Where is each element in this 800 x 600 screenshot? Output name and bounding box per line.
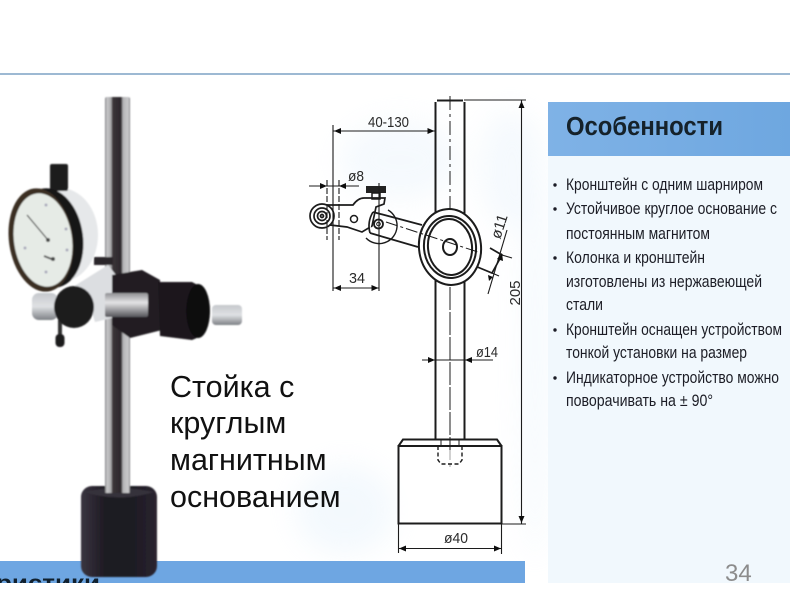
fine adjust knob [158, 282, 210, 340]
column [436, 100, 464, 439]
caption [170, 370, 341, 514]
extension and dimension lines [309, 100, 526, 554]
dial indicator [2, 184, 90, 296]
bottom blue band [0, 561, 525, 583]
dimension labels: 34 [349, 270, 365, 287]
caption: магнитным [170, 443, 327, 477]
dimension labels: ø14 [476, 344, 498, 361]
knob on dial [50, 164, 68, 191]
panel: features [548, 102, 790, 583]
knurled screw [366, 186, 386, 199]
feature list: Колонка и кронштейн [566, 248, 705, 267]
top rule [0, 73, 790, 75]
dimension labels: ø8 [348, 168, 364, 185]
page number: 34 [725, 560, 752, 587]
caption: Стойка с [170, 370, 294, 404]
faint background tint behind the drawing [295, 110, 549, 560]
magnetic base [81, 470, 157, 577]
feature list [553, 175, 782, 410]
feature list: постоянным магнитом [566, 224, 710, 243]
arm and pivot disc [327, 198, 422, 247]
panel header band [548, 102, 790, 156]
photo: dial indicator stand [2, 97, 242, 577]
base [398, 440, 502, 524]
feature list: поворачивать на ± 90° [566, 391, 713, 410]
eyelet [310, 204, 334, 228]
clamp ring [415, 206, 485, 288]
lever [56, 320, 64, 347]
silver clamp block [105, 293, 148, 317]
pin [212, 305, 242, 325]
caption: основанием [170, 480, 341, 514]
bracket [68, 265, 116, 322]
dimension labels: 205 [507, 280, 524, 306]
dimension labels: ø11 [488, 212, 512, 241]
clamp body [112, 270, 162, 338]
centre line [449, 96, 451, 470]
feature list: изготовлены из нержавеющей [566, 272, 762, 291]
locking tab [94, 257, 113, 265]
dimension labels: ø40 [444, 530, 468, 547]
rod [105, 97, 130, 492]
rear clamp housing [22, 188, 98, 282]
lower column centre line [449, 287, 451, 450]
caption: круглым [170, 406, 286, 440]
arrowheads [320, 101, 524, 552]
rear stub [475, 248, 502, 273]
feature list: тонкой установки на размер [566, 343, 747, 362]
heading: features: Особенности [566, 113, 723, 141]
axis line [386, 222, 478, 252]
left knob [54, 286, 94, 328]
feature list: стали [566, 295, 603, 314]
left cylinder [32, 293, 58, 320]
dimension labels [348, 114, 524, 547]
dimension labels: 40-130 [368, 114, 409, 131]
panel background [548, 102, 790, 583]
technical drawing [309, 96, 526, 554]
